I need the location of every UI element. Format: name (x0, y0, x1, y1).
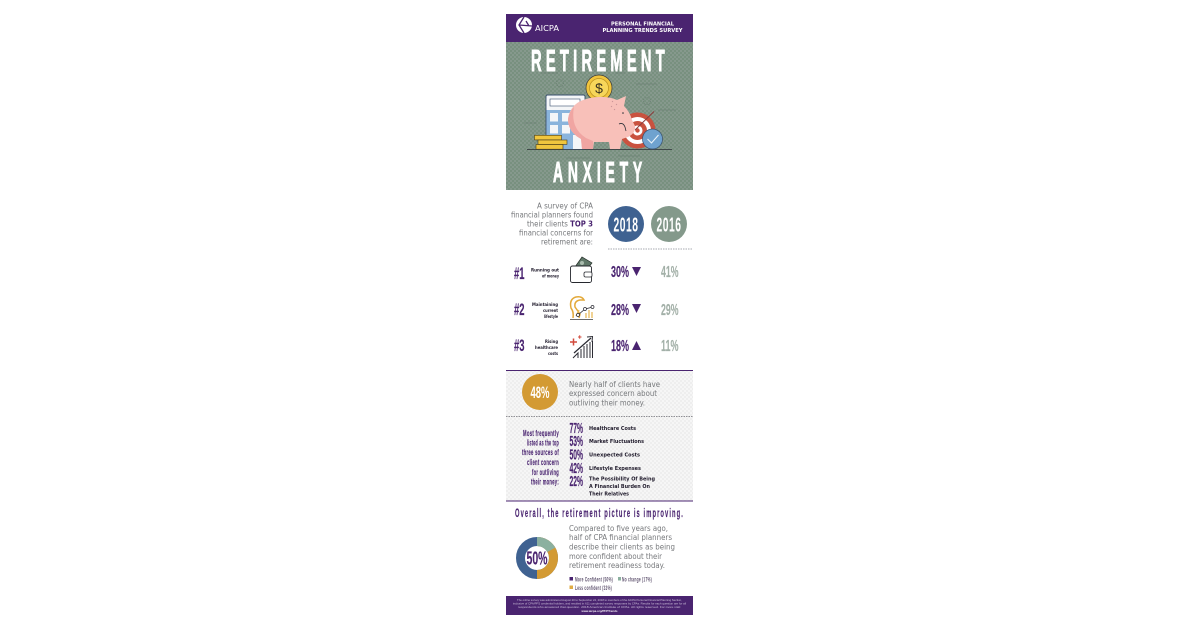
panel: outliving concern: Most frequently (523, 428, 559, 438)
list: sources of concern: Lifestyle Expenses (589, 466, 641, 472)
text: compared to five years ago: Compared to five years ago, (569, 524, 668, 533)
intro text: financial planners found (511, 210, 593, 220)
badge: 2018 (608, 206, 644, 242)
icon: chess knight and chart (570, 297, 594, 320)
legend (570, 576, 652, 592)
panel: outliving concern: client concern (527, 457, 559, 467)
panel: hero: ANXIETY (553, 157, 647, 189)
row 3: rising healthcare costs: costs (548, 351, 558, 357)
footer note: The online survey was administered August 20 to September 24, 2018 to members of the AICPA Personal Financial Planning Section, (517, 598, 682, 602)
footer (506, 596, 693, 615)
row 3: rising healthcare costs: 11% (661, 338, 679, 355)
header bar (506, 14, 693, 42)
list: sources of concern: Their Relatives (589, 492, 629, 498)
AICPA wordmark: AICPA (535, 24, 560, 33)
list: sources of concern: Market Fluctuations (589, 439, 644, 445)
badge: 2018: 2018 (614, 214, 638, 236)
row 2: maintaining current lifestyle (514, 297, 679, 320)
badge: 2016: 2016 (656, 214, 682, 236)
icon: piggy bank (568, 96, 635, 149)
row 3: rising healthcare costs: healthcare (535, 345, 558, 351)
survey name: PERSONAL FINANCIAL (611, 22, 675, 28)
legend: No change (17%) (622, 576, 652, 584)
row 3: rising healthcare costs: Rising (545, 339, 558, 345)
list: sources of concern: Healthcare Costs (589, 426, 636, 432)
intro text: financial concerns for (519, 228, 594, 238)
badge: 2016 (651, 206, 687, 242)
row 1: running out of money: of money (542, 274, 559, 280)
list: sources of concern: 50% (570, 448, 583, 464)
text: nearly half: outliving their money. (569, 398, 645, 408)
row 1: running out of money: #1 (514, 265, 524, 283)
row 2: maintaining current lifestyle: current (543, 308, 558, 314)
text: compared to five years ago (569, 524, 675, 570)
row 1: running out of money: 30% (611, 264, 629, 281)
row 3: rising healthcare costs (514, 335, 679, 358)
icon: wallet (570, 257, 592, 282)
footer note: www.aicpa.org/PFPTrends (581, 609, 618, 613)
icon: rising health costs chart (570, 335, 592, 358)
list: sources of concern: The Possibility Of Being (589, 476, 655, 482)
panel: outliving concern: their money: (531, 476, 559, 486)
icon: AICPA logo (516, 17, 532, 33)
heading: overall improving: Overall, the retirement picture is improving. (515, 508, 684, 520)
text: compared to five years ago: describe their clients as being (569, 542, 675, 552)
panel: hero: RETIREMENT (531, 43, 669, 78)
list: sources of concern: 77% (570, 421, 583, 437)
row 3: rising healthcare costs: #3 (514, 337, 524, 355)
donut chart (520, 542, 554, 574)
text: nearly half: expressed concern about (569, 389, 657, 398)
footer note (513, 598, 686, 613)
intro text: A survey of CPA (537, 202, 594, 210)
list: sources of concern: 53% (570, 434, 583, 450)
legend: Less confident (33%) (575, 585, 612, 592)
row 2: maintaining current lifestyle: Maintaining (532, 302, 558, 308)
icon: calculator (546, 95, 585, 149)
list: sources of concern (570, 421, 655, 498)
illustration: piggy bank scene (524, 73, 676, 158)
footer note: inclusive of CPA/PFS credential holders, and resulted in 611 completed survey responses by CPAs. Results for each question are for all (513, 602, 686, 606)
text: nearly half: Nearly half of clients have (569, 380, 660, 389)
panel: outliving concern (506, 370, 693, 501)
panel: outliving concern: listed as the top (527, 438, 559, 448)
row 2: maintaining current lifestyle: #2 (514, 301, 524, 319)
arrow: down (632, 267, 641, 276)
text: nearly half (569, 380, 660, 408)
row 1: running out of money: Running out (531, 268, 559, 274)
list: sources of concern: A Financial Burden On (589, 484, 650, 490)
badge: 48% (522, 374, 558, 410)
text: compared to five years ago: retirement readiness today. (569, 561, 665, 570)
arrow: up (632, 341, 641, 350)
row 2: maintaining current lifestyle: 28% (611, 302, 629, 319)
intro text: their clients TOP 3 (527, 220, 593, 228)
legend: More Confident (50%) (575, 576, 613, 584)
arrow: down (632, 304, 641, 313)
survey name: PLANNING TRENDS SURVEY (602, 28, 683, 34)
list: sources of concern: 42% (570, 461, 583, 477)
footer note: respondents who answered that question. 2018 American Institute of CPAs. All rights reserved. For more visit: (518, 605, 681, 609)
intro text (511, 202, 594, 246)
text: compared to five years ago: more confident about their (569, 552, 663, 561)
icon: stacked coins (534, 135, 567, 149)
donut chart: 50% (526, 548, 548, 568)
icon: target (620, 112, 656, 148)
icon: dollar coin: $ (595, 80, 603, 96)
row 2: maintaining current lifestyle: lifestyle (544, 314, 558, 320)
list: sources of concern: Unexpected Costs (589, 452, 640, 458)
icon: check badge (642, 129, 662, 149)
panel: outliving concern: for outliving (532, 467, 559, 477)
panel: hero (506, 42, 693, 190)
text: compared to five years ago: half of CPA financial planners (569, 533, 672, 542)
panel: outliving concern: three sources of (522, 447, 559, 457)
survey name (602, 22, 683, 34)
text: most frequently listed (522, 428, 559, 486)
row 2: maintaining current lifestyle: 29% (661, 302, 679, 319)
row 1: running out of money: 41% (661, 264, 679, 281)
list: sources of concern: 22% (570, 474, 583, 490)
badge: 48%: 48% (530, 383, 550, 402)
intro text: retirement are: (541, 238, 593, 246)
icon: dollar coin (586, 75, 612, 101)
row 1: running out of money (514, 257, 679, 283)
row 3: rising healthcare costs: 18% (611, 338, 629, 355)
